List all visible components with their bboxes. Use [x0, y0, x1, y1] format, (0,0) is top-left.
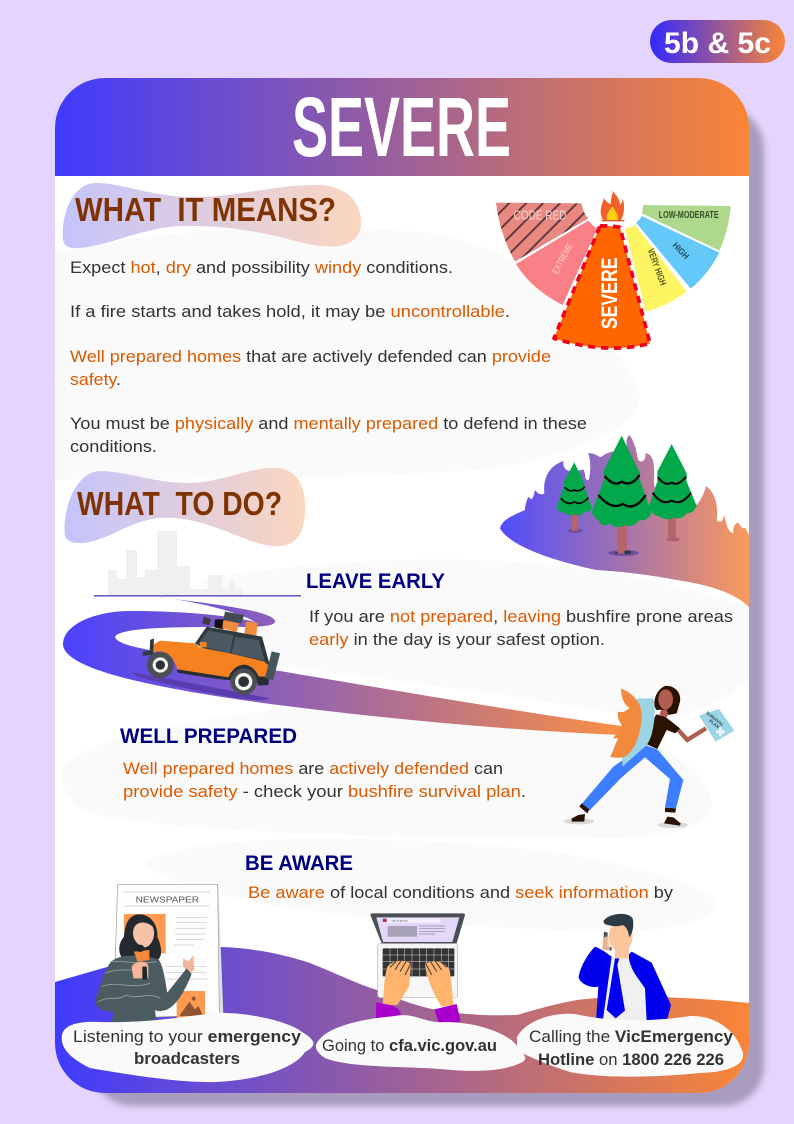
icon: person with shield — [564, 686, 734, 828]
heading: what it means: WHAT IT MEANS? — [75, 191, 336, 228]
gauge: high — [636, 216, 719, 289]
icon: man on phone — [579, 914, 671, 1022]
gauge: very high — [625, 225, 687, 312]
survival plan document: PLAN — [708, 718, 720, 729]
caption cloud: hotline — [517, 1014, 743, 1077]
gauge: severe: SEVERE — [597, 257, 622, 329]
gauge: extreme — [516, 221, 597, 305]
badge: 5b & 5c: 5b & 5c — [664, 27, 771, 60]
section: well prepared — [120, 725, 526, 801]
section: well prepared: provide safety - check your bushfire survival plan . — [123, 783, 526, 801]
header band — [55, 78, 749, 176]
survival plan document — [699, 709, 734, 742]
pale background blobs — [55, 228, 749, 931]
tree: large — [592, 436, 652, 556]
gauge: code red: CODE RED — [514, 208, 566, 222]
tree scene — [500, 435, 750, 608]
text block: what it means: safety. — [70, 371, 121, 389]
tree: right — [649, 444, 697, 541]
caption cloud: broadcasters: broadcasters — [134, 1050, 240, 1068]
gauge: high: HIGH — [671, 240, 691, 261]
icon: woman with newspaper: NEWSPAPER — [136, 895, 199, 905]
tree: small — [557, 462, 592, 533]
section: leave early: If you are not prepared , leaving bushfire prone areas — [309, 608, 733, 626]
heading: what to do — [65, 468, 305, 546]
fire danger gauge — [496, 191, 731, 348]
text block: what it means — [70, 259, 587, 456]
icon: woman with newspaper — [95, 884, 223, 1023]
caption cloud: website — [316, 1015, 525, 1071]
gauge: extreme: EXTREME — [550, 242, 575, 276]
icon: laptop with hands: cfa.vic.gov.au — [392, 918, 408, 922]
gauge: low moderate — [642, 205, 731, 251]
section: leave early — [306, 570, 733, 649]
text block: what it means: conditions. — [70, 438, 157, 456]
caption cloud: website: Going to cfa.vic.gov.au — [322, 1037, 497, 1055]
bottom wave — [55, 947, 749, 1093]
heading: what to do: WHAT TO DO? — [77, 485, 282, 522]
main card — [55, 78, 750, 1093]
gauge: severe — [554, 226, 650, 348]
gauge: code red — [496, 203, 588, 262]
section: well prepared: Well prepared homes are actively defended can — [123, 760, 503, 778]
icon: laptop with hands — [370, 913, 465, 1027]
city skyline — [108, 531, 242, 595]
section: be aware — [245, 852, 674, 902]
card shadow — [92, 108, 764, 1106]
section: leave early: early in the day is your safest option. — [309, 631, 605, 649]
caption cloud: broadcasters: Listening to your emergency — [73, 1028, 302, 1046]
gauge: low moderate: LOW-MODERATE — [659, 210, 719, 221]
survival plan document: SURVIVAL — [705, 710, 725, 728]
text block: what it means: Well prepared homes that are actively defended can provide — [70, 348, 551, 366]
caption cloud: hotline: Hotline on 1800 226 226 — [538, 1051, 724, 1069]
heading: what it means — [63, 183, 361, 248]
caption cloud: hotline: Calling the VicEmergency — [529, 1028, 734, 1046]
text block: what it means: You must be physically and mentally prepared to defend in these — [70, 415, 587, 433]
badge: 5b & 5c — [650, 20, 785, 63]
section: leave early: LEAVE EARLY — [306, 570, 445, 593]
icon: flame — [601, 191, 624, 221]
text block: what it means: Expect hot, dry and possibility windy conditions. — [70, 259, 453, 277]
title: SEVERE — [292, 80, 511, 174]
section: be aware: BE AWARE — [245, 852, 353, 875]
caption cloud: broadcasters — [62, 1013, 313, 1082]
road and flames — [500, 435, 750, 608]
section: well prepared: WELL PREPARED — [120, 725, 297, 748]
horizon line — [94, 595, 301, 597]
gauge: very high: VERY HIGH — [646, 247, 668, 287]
road: winding — [63, 597, 622, 735]
icon: jeep — [131, 612, 280, 700]
section: be aware: Be aware of local conditions and seek information by — [248, 884, 674, 902]
text block: what it means: If a fire starts and takes hold, it may be uncontrollable . — [70, 303, 510, 321]
